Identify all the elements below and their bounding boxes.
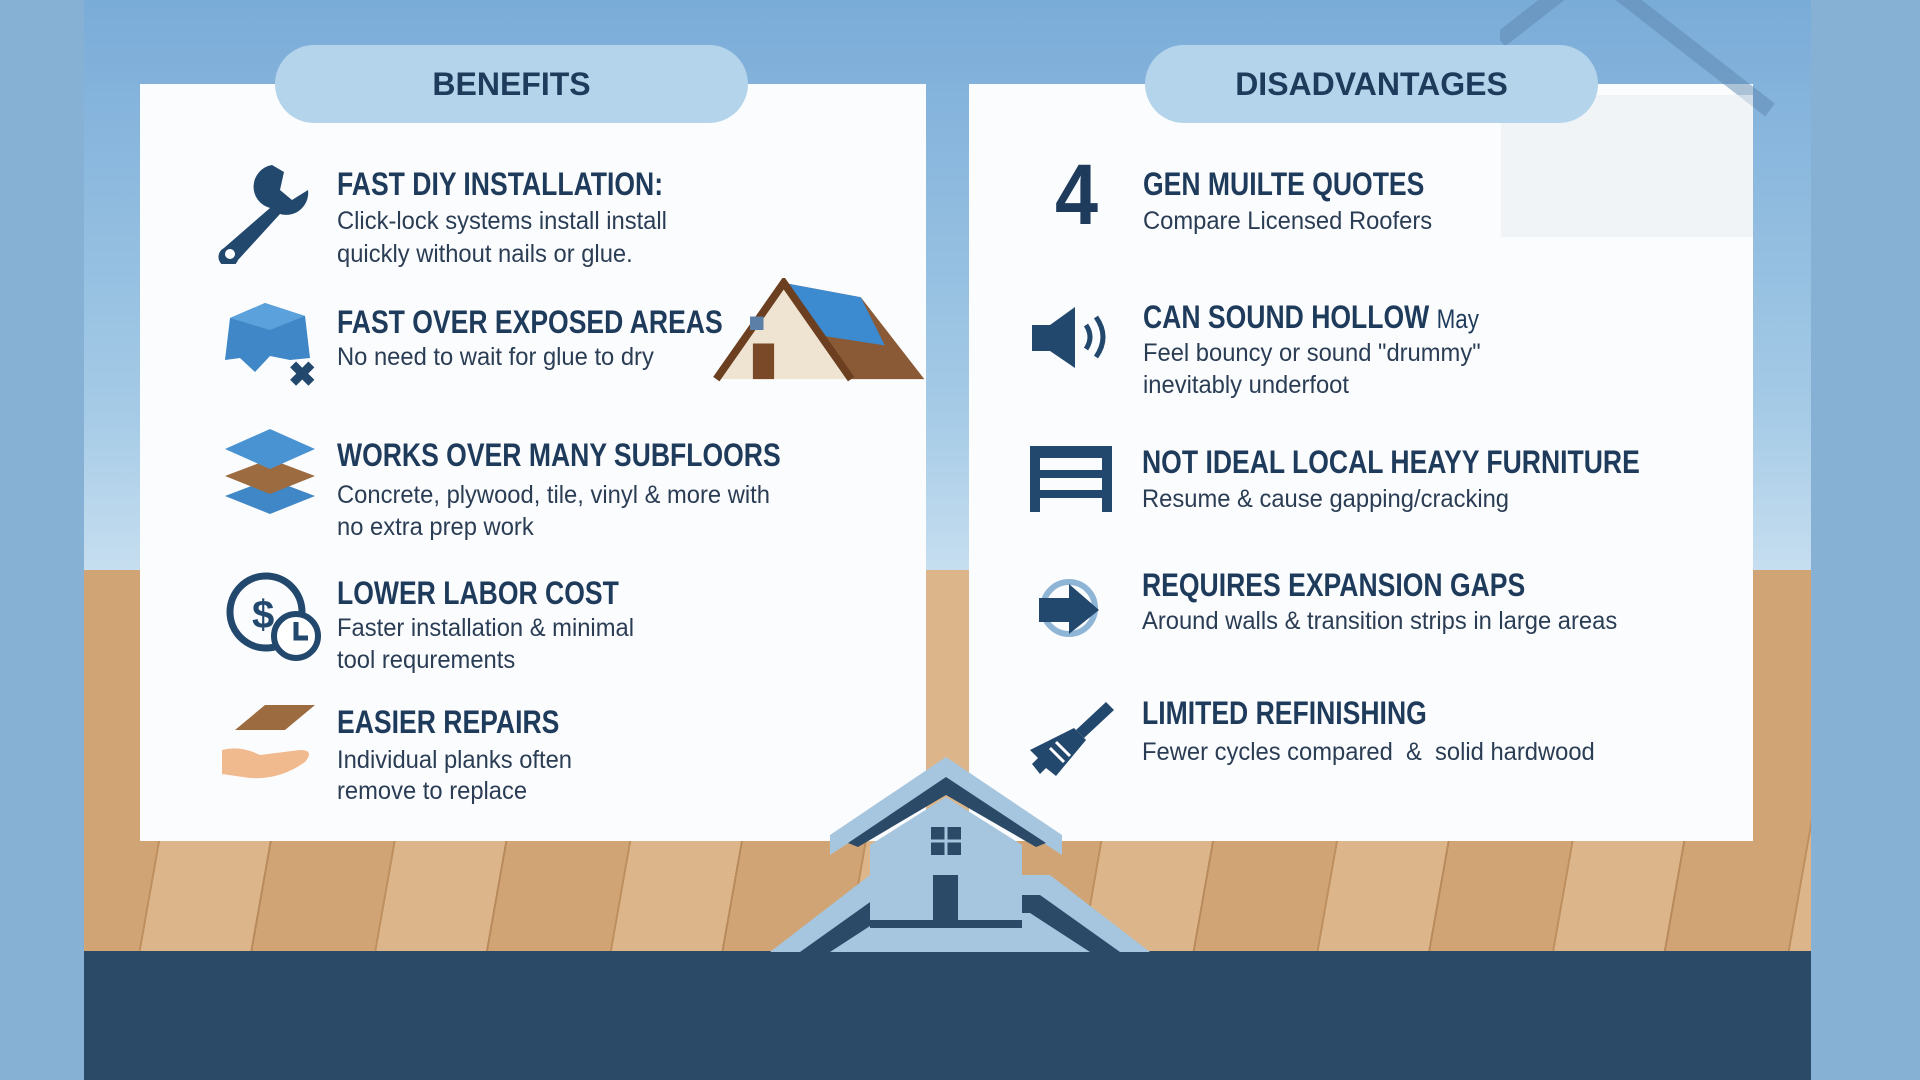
disadvantage 2 text: CAN SOUND HOLLOW May xyxy=(1143,299,1479,335)
disadvantage 5 text: LIMITED REFINISHING xyxy=(1142,695,1427,731)
bottom navy band xyxy=(84,951,1811,1080)
disadvantage 1 text: Compare Licensed Roofers xyxy=(1143,207,1432,235)
benefit 1 text: quickly without nails or glue. xyxy=(337,240,633,268)
panel: disadvantages xyxy=(969,84,1753,841)
decorative house top right xyxy=(1500,0,1775,237)
disadvantage 1 text: GEN MUILTE QUOTES xyxy=(1143,166,1424,202)
benefit 5 text: remove to replace xyxy=(337,777,527,805)
benefit 4 text: tool requrements xyxy=(337,646,515,674)
disadvantage 5 text xyxy=(1142,695,1595,766)
background sky xyxy=(84,0,1811,580)
benefit 3 text: Concrete, plywood, tile, vinyl & more with xyxy=(337,481,770,509)
heading: disadvantages pill: DISADVANTAGES xyxy=(1235,66,1508,102)
disadvantage 3 text: NOT IDEAL LOCAL HEAYY FURNITURE xyxy=(1142,444,1640,480)
icon: number 4: 4 xyxy=(1055,147,1098,243)
icon: expansion arrow xyxy=(1039,579,1099,637)
icon: wrench xyxy=(218,165,308,264)
icon: tarp xyxy=(225,303,316,388)
disadvantage 4 text: REQUIRES EXPANSION GAPS xyxy=(1142,567,1525,603)
disadvantage 1 text xyxy=(1143,166,1432,235)
disadvantage 2 text: Feel bouncy or sound "drummy" xyxy=(1143,339,1481,367)
icon: dollar clock: $ xyxy=(252,593,274,637)
disadvantage 2 text xyxy=(1143,299,1481,399)
benefit 4 text xyxy=(337,575,634,674)
benefit 2 text: FAST OVER EXPOSED AREAS xyxy=(337,304,723,340)
benefit 4 text: LOWER LABOR COST xyxy=(337,575,619,611)
disadvantage 3 text: Resume & cause gapping/cracking xyxy=(1142,485,1509,513)
heading: benefits pill: BENEFITS xyxy=(432,66,591,102)
benefit 5 text: EASIER REPAIRS xyxy=(337,704,559,740)
benefit 2 text xyxy=(337,304,723,371)
icon: furniture xyxy=(1030,446,1112,512)
icon: dollar clock xyxy=(226,572,321,661)
benefit 3 text xyxy=(337,437,781,541)
benefit 5 text xyxy=(337,704,572,805)
benefit 3 text: no extra prep work xyxy=(337,513,534,541)
disadvantage 2 text: inevitably underfoot xyxy=(1143,371,1349,399)
benefit 1 text: Click-lock systems install install xyxy=(337,207,667,235)
benefit 3 text: WORKS OVER MANY SUBFLOORS xyxy=(337,437,781,473)
benefit 5 text: Individual planks often xyxy=(337,746,572,774)
heading: benefits pill xyxy=(275,45,748,123)
benefit 2 text: No need to wait for glue to dry xyxy=(337,343,654,371)
icon: hand with plank xyxy=(222,705,315,778)
icon: paintbrush xyxy=(1030,702,1114,776)
disadvantage 4 text: Around walls & transition strips in large areas xyxy=(1142,607,1617,635)
icon: speaker xyxy=(1032,307,1106,368)
panel: benefits xyxy=(140,84,926,841)
disadvantage 4 text xyxy=(1142,567,1617,635)
disadvantage 3 text xyxy=(1142,444,1640,513)
background wood floor xyxy=(84,570,1811,955)
icon: center house xyxy=(770,757,1150,952)
benefit 1 text xyxy=(337,166,667,268)
icon: house with tarp roof xyxy=(713,278,924,382)
heading: disadvantages pill xyxy=(1145,45,1598,123)
benefit 4 text: Faster installation & minimal xyxy=(337,614,634,642)
icon: layers xyxy=(225,429,315,514)
benefit 1 text: FAST DIY INSTALLATION: xyxy=(337,166,663,202)
disadvantage 5 text: Fewer cycles compared & solid hardwood xyxy=(1142,738,1595,766)
